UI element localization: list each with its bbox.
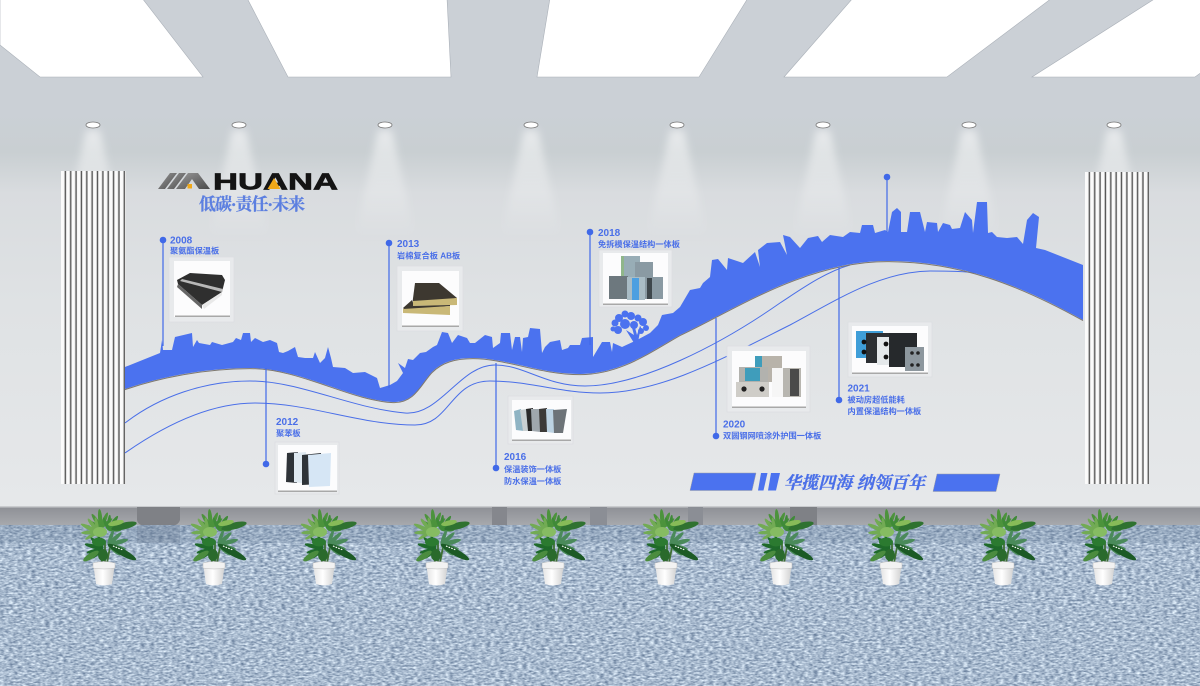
band lower edge shadow	[125, 262, 1083, 403]
timeline 2008	[160, 236, 234, 346]
plant 8	[862, 508, 925, 586]
timeline 2012	[263, 368, 339, 494]
plant 10	[1075, 508, 1138, 586]
timeline 2018	[587, 228, 681, 345]
carpet floor	[0, 525, 1200, 686]
ceiling light panels	[0, 0, 1200, 77]
logo wordmark: HUANA	[213, 168, 338, 194]
banner text: 华揽四海 纳领百年	[784, 474, 927, 492]
right slatted column	[1085, 172, 1149, 484]
product name: 岩棉复合板 AB板	[397, 250, 461, 260]
year label: 2021	[848, 384, 870, 394]
tagline: 低碳·责任·未来	[199, 194, 305, 214]
tree silhouette	[610, 310, 649, 343]
baseboard reflection strip	[0, 506, 1200, 526]
left slatted column	[61, 171, 126, 484]
product name: 双圆钢网喷涂外护围一体板	[723, 430, 822, 440]
pin	[713, 318, 719, 439]
logo icon	[158, 173, 210, 189]
pin	[160, 237, 166, 346]
product names: 保温装饰一体板	[504, 464, 562, 474]
pin	[493, 363, 499, 471]
product image	[508, 396, 573, 444]
timeline 2021	[836, 267, 932, 416]
product name: 免拆模保温结构一体板	[598, 239, 681, 249]
skyline band	[125, 202, 1083, 402]
product names	[848, 394, 922, 416]
top skyline pin	[884, 174, 890, 232]
product image	[275, 442, 339, 494]
slogan banner	[690, 473, 1000, 492]
product image	[727, 346, 810, 412]
pin	[386, 240, 392, 388]
timeline 2020	[713, 318, 822, 440]
product image	[169, 257, 234, 322]
product names: 被动房超低能耗	[848, 394, 905, 404]
plant 9	[974, 508, 1037, 586]
product image	[599, 250, 672, 307]
year label: 2018	[598, 228, 621, 239]
product image	[397, 266, 463, 331]
year label: 2020	[723, 420, 746, 430]
pin	[587, 229, 593, 345]
timeline 2013	[386, 239, 463, 388]
wall and ceiling background	[0, 0, 1200, 508]
year label: 2013	[397, 239, 420, 250]
product names: 防水保温一体板	[504, 476, 562, 486]
product names	[504, 464, 562, 486]
product image	[848, 322, 932, 377]
plant 7	[752, 508, 815, 586]
plant 1	[75, 508, 138, 586]
plant 4	[408, 508, 471, 586]
plant 6	[637, 508, 700, 586]
thin curve line 1	[125, 265, 850, 423]
plant 3	[295, 508, 358, 586]
pin	[836, 267, 842, 403]
banner small bars	[758, 473, 780, 490]
plant 2	[185, 508, 248, 586]
logo orange triangle	[268, 178, 280, 189]
thin curve line 2	[125, 271, 985, 453]
year label: 2008	[170, 236, 193, 246]
spotlights	[63, 122, 1144, 237]
banner left bar	[690, 473, 756, 490]
product name: 聚苯板	[276, 428, 301, 438]
product names: 内置保温结构一体板	[848, 406, 922, 416]
year label: 2016	[504, 452, 527, 463]
year label: 2012	[276, 417, 299, 428]
pin	[263, 368, 269, 467]
product name: 聚氨酯保温板	[170, 246, 220, 256]
timeline 2016	[493, 363, 573, 486]
logo	[158, 168, 338, 194]
plant 5	[524, 508, 587, 586]
banner right bar	[933, 474, 1000, 492]
